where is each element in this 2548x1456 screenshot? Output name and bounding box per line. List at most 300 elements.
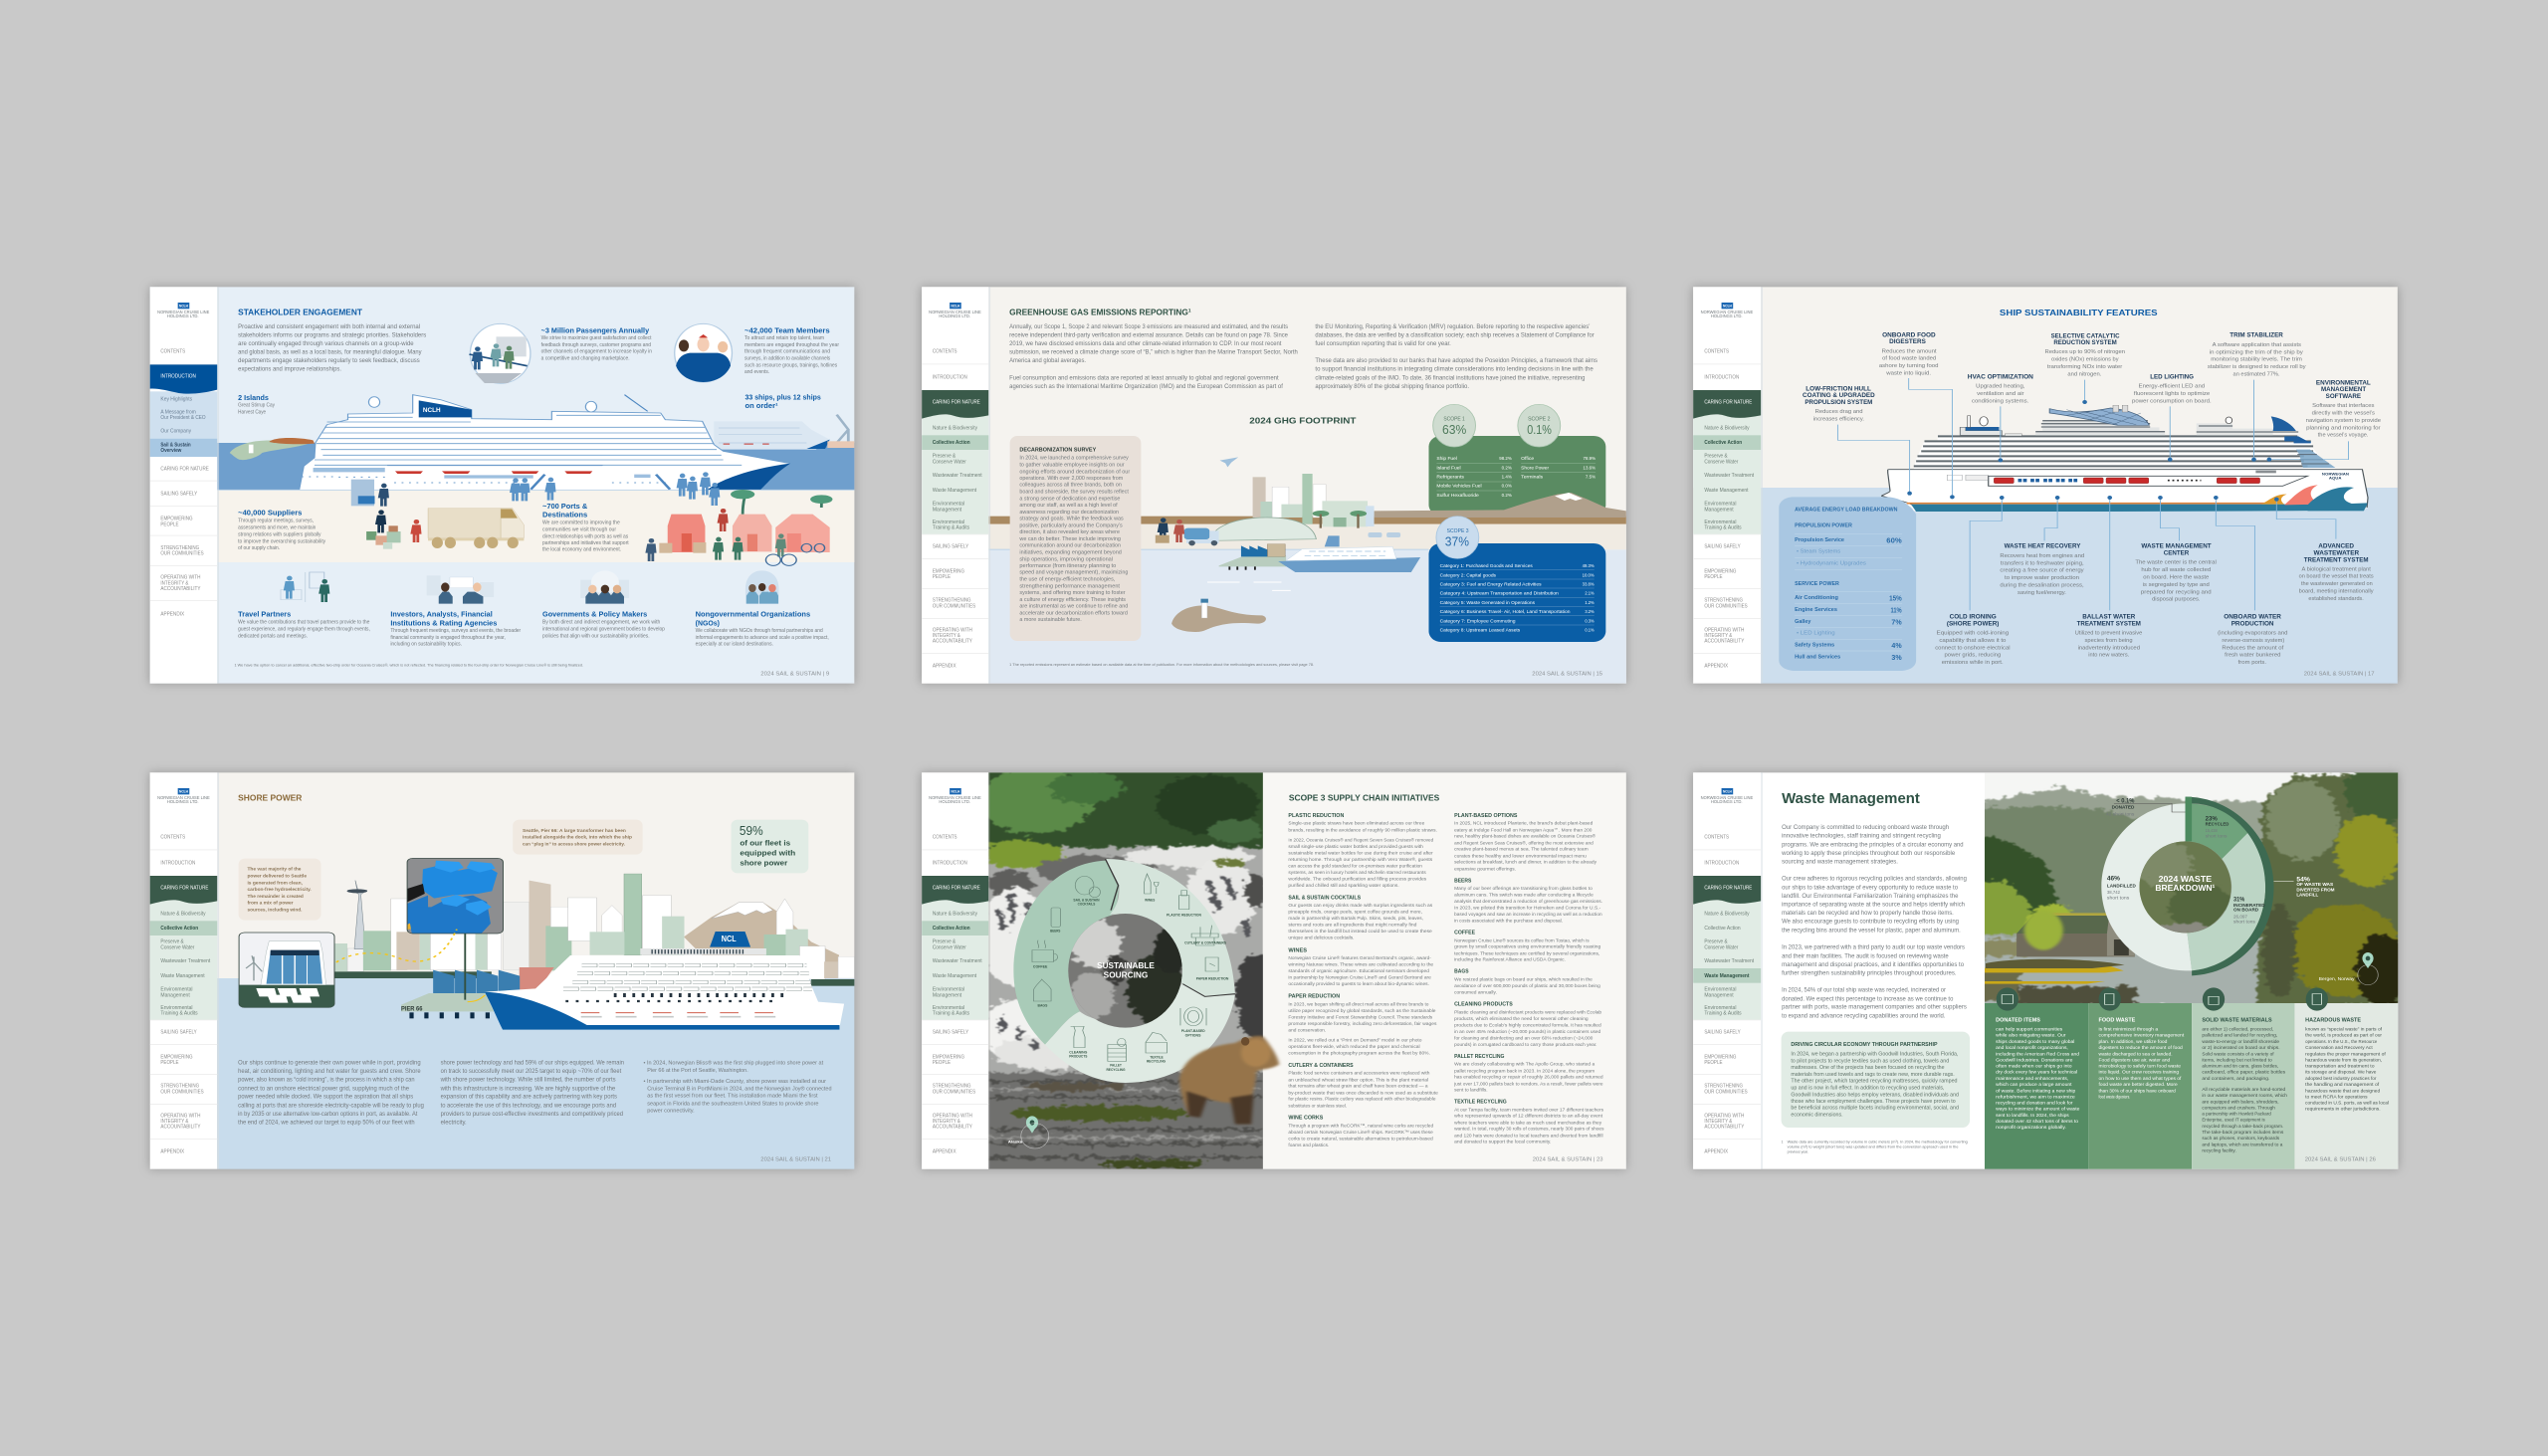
callout: onboard water production: PRODUCTION: [2231, 620, 2274, 627]
initiatives column 1: SAIL & SUSTAIN COCKTAILS: [1288, 896, 1361, 901]
power connection cable: [336, 930, 485, 1002]
initiatives column 2: selections at breakfast, lunch and dinner, in addition to the already: [1454, 860, 1596, 865]
donut center label: 2024 WASTE: [2159, 875, 2212, 884]
scope 1 and 2 table: Island Fuel: [1436, 466, 1461, 471]
donut segment labels: SAIL & SUSTAIN: [1073, 898, 1099, 902]
logo: [929, 303, 981, 319]
panel: average energy load breakdown: • Hydrodynamic Upgrades: [1797, 561, 1866, 566]
sidebar navigation: Training & Audits: [1704, 525, 1742, 530]
initiatives column 1: [1288, 814, 1438, 1148]
initiatives column 2: CLEANING PRODUCTS: [1454, 1002, 1513, 1007]
map pin: Alaska: [1008, 1116, 1049, 1148]
sidebar navigation: OUR COMMUNITIES: [1704, 604, 1748, 609]
initiatives column 1: for plastic resins. Plastic cutlery was replaced with other biodegradable: [1288, 1097, 1435, 1102]
body text: and their main facilities. The audit is focused on reviewing waste: [1782, 952, 1949, 959]
initiatives column 1: in partnership by Norwegian Cruise Line® and Gerard Bertrand are: [1288, 975, 1431, 980]
sidebar navigation: Wastewater Treatment: [933, 474, 982, 479]
sidebar navigation: STRENGTHENING: [160, 1084, 199, 1089]
callout: cold ironing: [1935, 613, 2011, 666]
donut labels: short tons: [2107, 896, 2129, 901]
sidebar navigation: Training & Audits: [933, 525, 969, 530]
logo: HOLDINGS LTD.: [1711, 314, 1743, 319]
block: investors: [390, 610, 521, 647]
intro text column 1: [1009, 322, 1298, 390]
callout: cold ironing: emissions while in port.: [1942, 661, 2004, 666]
callout: hydroelectricity: The remainder is created: [247, 895, 304, 900]
initiatives column 2: pallet recycling program back in 2023. In 2024 alone, the program: [1454, 1069, 1594, 1074]
donut labels: 54%: [2296, 876, 2310, 883]
block: team members: To attract and retain top talent, team: [744, 336, 824, 341]
pier illustration: [401, 967, 554, 1018]
logo: [1701, 303, 1753, 319]
column: food waste: is first minimized through a: [2099, 1027, 2159, 1032]
callout: trim stabilizer: [2208, 331, 2307, 377]
body text column 1: power, also known as “cold ironing”, is the process in which a ship can: [238, 1076, 415, 1083]
callout: onboard food digesters: ashore by turning food: [1879, 364, 1938, 369]
column: solid waste materials: compactors and crushers. Through: [2202, 1106, 2275, 1111]
block: ports: communities we visit through our: [542, 527, 616, 532]
column: donated items: maintenance and enhancements,: [1996, 1077, 2069, 1082]
panel: average energy load breakdown: PROPULSION POWER: [1795, 523, 1852, 528]
bear: [1179, 1036, 1279, 1125]
callout: onboard water production: ONBOARD WATER: [2224, 613, 2282, 620]
initiatives column 1: WINE CORKS: [1288, 1116, 1323, 1121]
callout: LED lighting: [2132, 373, 2212, 404]
block: ports: the local economy and environment.: [542, 547, 621, 552]
scope 3 table: Category 7: Employee Commuting: [1440, 619, 1516, 624]
scope 1 and 2 table: 98.2%: [1499, 457, 1512, 462]
initiatives column 2: Many of our beer offerings are transitioning from glass bottles to: [1454, 887, 1592, 892]
column: hazardous waste: [2305, 1018, 2389, 1112]
body text: [1781, 823, 1967, 1019]
donut labels: short tons: [2206, 834, 2228, 839]
sidebar navigation: Nature & Biodiversity: [933, 912, 978, 917]
body text column 1: connect to an onshore electrical power grid, supplying much of the: [238, 1085, 409, 1092]
sidebar navigation: OPERATING WITH: [1704, 628, 1744, 633]
intro text: and global basis, as well as a local basis, for meaningful dialogue. Many: [238, 348, 422, 355]
initiatives column 1: that remains after wheat grain and chaff have been extracted — a: [1288, 1084, 1428, 1089]
village houses and cyclist illustration: [645, 490, 832, 565]
callout: waste heat recovery: creating a free source of energy: [2000, 568, 2085, 573]
sidebar navigation: Preserve &: [933, 454, 956, 459]
column: hazardous waste: transportation and treatment to: [2305, 1064, 2375, 1069]
donut labels: OF WASTE WAS: [2296, 883, 2333, 888]
map pin: Bergen: Bergen, Norway: [2319, 977, 2355, 982]
donut labels: 23%: [2206, 815, 2218, 822]
block: passengers: We strive to maximize guest satisfaction and collect: [541, 336, 652, 341]
panel: decarbonization survey: colleagues across all three brands, both on: [1019, 483, 1122, 488]
callout: selective catalytic reduction: [2045, 332, 2125, 377]
sidebar navigation: Training & Audits: [933, 1011, 969, 1016]
scope 2 bubble: SCOPE 2: [1528, 417, 1551, 422]
sidebar navigation: ACCOUNTABILITY: [160, 587, 200, 592]
initiatives column 2: just over 17,000 pallets back to vendors. As a result, fewer pallets were: [1453, 1082, 1603, 1087]
initiatives column 2: creative plant-based menus at sea. The talented culinary team: [1454, 847, 1589, 852]
initiatives column 1: by-product waste that was once discarded is now used as a substitute: [1288, 1091, 1438, 1096]
intro text: [238, 322, 426, 372]
callout: trim stabilizer: monitoring stability levels. The trim: [2211, 357, 2302, 362]
island with lighthouse: [230, 438, 315, 460]
panel: greenhouse gas emissions page: [922, 287, 1626, 684]
photo: Norwegian fjord and cabin: [1985, 772, 2399, 1003]
sidebar navigation: APPENDIX: [1704, 664, 1728, 669]
callout: Seattle Pier 66: can “plug in” to access shore power electricity.: [523, 842, 625, 847]
body text: landfill. Our Environmental Familiarization Training emphasizes the: [1782, 892, 1958, 900]
column: donated items: ways to minimize the amount of waste: [1995, 1107, 2079, 1112]
panel: driving circular economy: DRIVING CIRCULAR ECONOMY THROUGH PARTNERSHIP: [1791, 1043, 1938, 1048]
block: travel partners: guest experience, and regularly engage them through events,: [238, 627, 370, 632]
block: governments: [542, 610, 665, 639]
panel: decarbonization survey: among our staff, as well as a high level of: [1019, 504, 1118, 509]
column: donated items: Goodwill Industries. Donations are: [1996, 1058, 2072, 1063]
callout: ballast water treatment: species from being: [2085, 639, 2133, 644]
block: travel partners: We value the contributions that travel partners provide to the: [238, 620, 370, 625]
panel: decarbonization survey: communication around our decarbonization: [1019, 543, 1121, 548]
panel: driving circular economy: [1782, 1032, 1970, 1128]
initiatives column 1: substitutes or stainless steel.: [1288, 1104, 1347, 1109]
sidebar navigation: Environmental: [1704, 502, 1736, 507]
column: donated items: can help support communities: [1996, 1027, 2062, 1032]
page footer: 2024 SAIL & SUSTAIN | 21: [760, 1157, 832, 1162]
block: team members: through frequent communications and: [744, 349, 830, 354]
logo: NORWEGIAN CRUISE LINE: [1701, 311, 1753, 315]
body text column 2: expansion of this capability and are actively partnering with key ports: [441, 1093, 617, 1100]
donut center image: [1068, 914, 1182, 1028]
scope 1 and 2 table: Office: [1521, 457, 1534, 462]
panel: decarbonization survey: ship operations, improving operational: [1019, 557, 1113, 562]
column: solid waste materials: recycled through a take-back program.: [2202, 1125, 2284, 1130]
sidebar navigation: APPENDIX: [933, 1149, 956, 1154]
icon: passengers circle: [469, 323, 531, 383]
donut segment labels: TEXTILE: [1150, 1055, 1164, 1059]
callout: onboard water production: reverse-osmosis system): [2222, 639, 2284, 644]
sidebar navigation: SAILING SAFELY: [933, 1030, 968, 1035]
scope 3 table: Category 4: Upstream Transportation and Distribution: [1440, 591, 1559, 596]
donut labels: RECYCLED: [2206, 822, 2229, 827]
body text: innovative technologies, staff training and stringent recycling: [1782, 832, 1941, 839]
sidebar navigation: A Message from: [160, 410, 196, 415]
sidebar navigation: CONTENTS: [160, 349, 185, 354]
sidebar navigation: APPENDIX: [1704, 1149, 1728, 1154]
panel: driving circular economy: Goodwill Industries also helps employ veterans, disabled individuals and: [1791, 1093, 1959, 1098]
column: hazardous waste: the world, is produced as part of our: [2305, 1033, 2382, 1038]
callout: waste management center: disposal purposes.: [2152, 597, 2201, 602]
scope 3 bubble: SCOPE 3: [1447, 529, 1469, 534]
panel: driving circular economy: those who face employment challenges. These projects have proven to: [1791, 1100, 1956, 1105]
column: donated items: [1995, 1018, 2079, 1131]
intro text: departments engage stakeholders regularly to seek feedback, discuss: [238, 356, 420, 364]
initiatives column 2: in costs associated with the purchase and disposal.: [1454, 919, 1563, 924]
scope 2 bubble: [1518, 404, 1561, 447]
body text: working to apply these principles throughout both our responsible: [1781, 849, 1955, 857]
logo: HOLDINGS LTD.: [167, 800, 199, 805]
callout: environmental management software: Software that interfaces: [2312, 404, 2375, 409]
column: donated items: refurbishment, we aim to maximize: [1996, 1095, 2075, 1100]
panel: decarbonization survey: DECARBONIZATION SURVEY: [1019, 448, 1096, 453]
sidebar navigation: Environmental: [933, 502, 964, 507]
callout: HVAC optimization: HVAC OPTIMIZATION: [1968, 373, 2033, 380]
block: ships: [744, 393, 821, 410]
callout: advanced wastewater treatment: [2299, 542, 2375, 602]
column: food waste: microbiology to safely turn food waste: [2099, 1064, 2181, 1069]
sidebar navigation: CONTENTS: [160, 835, 185, 840]
intro text column 2: the EU Monitoring, Reporting & Verification (MRV) regulation. Before reporting to the respective agencies’: [1315, 322, 1591, 330]
heading: Waste Management: [1782, 790, 1920, 806]
logo: HOLDINGS LTD.: [939, 314, 970, 319]
callout: waste management center: CENTER: [2164, 549, 2190, 556]
callout: selective catalytic reduction: oxides (NOx) emissions by: [2051, 357, 2119, 362]
initiatives column 1: Norwegian Cruise Line® features Gerard Bertrand’s organic, award-: [1288, 955, 1431, 961]
initiatives column 2: techniques. These techniques are certified by several organizations,: [1454, 951, 1600, 956]
sidebar navigation: Our Company: [160, 429, 192, 434]
block: governments: Governments & Policy Makers: [542, 610, 647, 618]
panel: decarbonization survey: direction, it also revealed key areas where: [1019, 530, 1121, 535]
block: passengers: a competitive and changing marketplace.: [541, 356, 630, 361]
stat callout: 59 percent: [732, 820, 808, 873]
sidebar navigation: Wastewater Treatment: [933, 959, 982, 964]
panel: decarbonization survey: a culture of energy efficiency. These insights: [1019, 598, 1126, 603]
scope 1 and 2 table: 13.6%: [1584, 466, 1595, 471]
block: islands: Harvest Caye: [238, 410, 267, 415]
body text column 2: [440, 1059, 624, 1126]
initiatives column 1: aboard certain Norwegian Cruise Line® ships. ReCORK™ uses these: [1288, 1130, 1433, 1136]
sidebar navigation: Collective Action: [933, 927, 970, 932]
sidebar navigation: OUR COMMUNITIES: [933, 1090, 975, 1095]
column: solid waste materials: and containers, and packaging.: [2202, 1077, 2270, 1082]
sidebar navigation: PEOPLE: [933, 575, 951, 580]
intro text column 2: These data are also provided to our banks that have adopted the Poseidon Principles, a framework that aims: [1315, 356, 1597, 364]
callout: waste management center: hub for all waste collected: [2141, 568, 2211, 573]
column: donated items: which can produce a large amount: [1995, 1083, 2072, 1088]
sidebar navigation: CARING FOR NATURE: [933, 886, 980, 891]
panel: decarbonization survey: awareness regarding our decarbonization: [1019, 511, 1119, 516]
column: solid waste materials: are equipped with balers, shredders,: [2202, 1100, 2279, 1105]
callout: environmental management software: navigation system to provide: [2306, 419, 2382, 424]
callout: advanced wastewater treatment: A biological treatment plant: [2301, 567, 2371, 572]
body text column 1: power needed while docked. We support the aspiration that all ships: [238, 1093, 413, 1100]
donut labels: LANDFILL: [2296, 893, 2319, 898]
sidebar navigation: Conserve Water: [1704, 945, 1738, 950]
column: food waste: [2098, 1018, 2185, 1100]
block: ports: [542, 502, 629, 552]
initiatives column 1: consumption in the photography program across the fleet by 80%.: [1288, 1051, 1430, 1056]
beach band: [217, 490, 854, 562]
intro text: are continually engaged through various channels on a group-wide: [238, 339, 414, 347]
initiatives column 2: for cleaning and disinfecting and an over 60% reduction (~24,000: [1454, 1036, 1592, 1041]
block: governments: policies that align with our sustainability priorities.: [542, 634, 650, 639]
callout: waste management center: The waste center is the central: [2135, 560, 2217, 565]
initiatives column 2: including the Rainforest Alliance and USDA Organic.: [1454, 957, 1566, 962]
body text column 2: with this infrastructure is increasing. We are highly supportive of the: [440, 1085, 615, 1092]
background ship and crane: [714, 415, 854, 450]
callout: HVAC optimization: conditioning systems.: [1972, 399, 2029, 404]
column: donated items: ships donated goods to many global: [1996, 1040, 2074, 1045]
panel: average energy load breakdown: Air Conditioning: [1795, 596, 1838, 601]
callout: hydroelectricity: [239, 859, 320, 921]
initiatives column 1: systems, as seen in luxury hotels and Michelin starred restaurants: [1288, 871, 1426, 876]
scope 3 table: 1.2%: [1585, 601, 1594, 606]
scope 3 bubble: 37%: [1445, 535, 1469, 549]
callout: selective catalytic reduction: Reduces up to 90% of nitrogen: [2045, 350, 2125, 355]
callout: low-friction hull coating: PROPULSION SYSTEM: [1805, 398, 1872, 406]
panel: average energy load breakdown: SERVICE POWER: [1795, 582, 1839, 587]
sidebar navigation: STRENGTHENING: [933, 598, 971, 603]
body text column 3 bullets: [644, 1061, 832, 1114]
callout: selective catalytic reduction: SELECTIVE CATALYTIC: [2051, 332, 2120, 339]
sidebar navigation: EMPOWERING: [933, 1055, 964, 1060]
initiatives column 2: new, healthy plant-based dishes are available on Oceania Cruises®: [1454, 834, 1596, 839]
callout: hydroelectricity: sources, including wind.: [247, 908, 303, 913]
page footer: 2024 SAIL & SUSTAIN | 17: [2304, 672, 2375, 677]
panel: average energy load breakdown: 3%: [1891, 653, 1902, 662]
initiatives column 2: BAGS: [1454, 969, 1469, 974]
panel: driving circular economy: In 2024, we began a partnership with Goodwill Industries, South Florida,: [1791, 1052, 1959, 1057]
footnote: [1782, 1140, 1968, 1153]
scope 1 and 2 table: Ship Fuel: [1436, 457, 1457, 462]
heading: SHIP SUSTAINABILITY FEATURES: [2000, 309, 2158, 317]
callout: onboard water production: (including evaporators and: [2218, 631, 2287, 636]
sidebar navigation: Management: [1704, 993, 1734, 998]
callout: advanced wastewater treatment: on board the vessel that treats: [2299, 574, 2374, 579]
sidebar navigation: CARING FOR NATURE: [160, 467, 209, 472]
panel: decarbonization survey: are instrumental as we continue to refine and: [1019, 604, 1128, 609]
column: donated items: dry dock every few years for technical: [1996, 1070, 2077, 1075]
column: solid waste materials: or 2) incinerated on board our ships.: [2202, 1046, 2280, 1051]
sidebar navigation: Environmental: [1704, 520, 1736, 525]
callout: environmental management software: ENVIRONMENTAL: [2316, 379, 2371, 386]
donut segment labels: PALLET: [1110, 1063, 1122, 1067]
column: solid waste materials: Enterprise, used IT equipment is: [2202, 1118, 2265, 1123]
initiatives column 2: analysis that demonstrated a reduction of greenhouse gas emissions.: [1454, 900, 1602, 905]
block: investors: Investors, Analysts, Financial: [390, 610, 493, 618]
sidebar navigation: Preserve &: [1704, 454, 1728, 459]
block: islands: [238, 393, 276, 415]
sidebar navigation: Key Highlights: [160, 397, 192, 402]
callout: cold ironing: connect to onshore electrical: [1935, 646, 2011, 651]
sidebar navigation: Wastewater Treatment: [160, 959, 210, 964]
panel: average energy load breakdown: Safety Systems: [1795, 643, 1835, 648]
sidebar navigation: APPENDIX: [933, 664, 956, 669]
logo: NCLH: [952, 789, 959, 793]
sidebar navigation: Environmental: [933, 987, 964, 992]
block: investors: including on sustainability topics.: [390, 642, 462, 647]
callout: ballast water treatment: inadvertently introduced: [2078, 646, 2140, 651]
callout: Seattle Pier 66: installed alongside the dock, into which the ship: [523, 835, 632, 840]
donut segment labels: RECYCLING: [1147, 1059, 1166, 1063]
initiatives column 1: Single-use plastic straws have been eliminated across our three: [1288, 821, 1424, 826]
scope 1 and 2 table: 78.9%: [1584, 457, 1595, 462]
block: team members: members are engaged throughout the year: [744, 343, 839, 348]
sidebar navigation: SAILING SAFELY: [933, 544, 968, 549]
intro text column 2: fuel consumption reporting that is valid for one year.: [1315, 339, 1451, 347]
sidebar navigation: Collective Action: [160, 927, 198, 932]
block: suppliers: ~40,000 Suppliers: [238, 509, 302, 517]
donut labels: INCINERATED: [2233, 904, 2265, 909]
callout: environmental management software: [2306, 379, 2382, 438]
sidebar navigation: ACCOUNTABILITY: [160, 1125, 200, 1130]
scope 3 table: 33.8%: [1583, 582, 1594, 587]
block: team members: surveys, in addition to available channels: [744, 356, 830, 361]
donut segment labels: OPTIONS: [1185, 1033, 1200, 1037]
column: hazardous waste: the handling and management of: [2305, 1083, 2380, 1088]
sidebar navigation: Collective Action: [1704, 441, 1742, 446]
column: solid waste materials: such as phones, monitors, keyboards: [2202, 1137, 2279, 1142]
sidebar navigation: Conserve Water: [933, 945, 966, 950]
intro text column 2: to support financial institutions in integrating climate considerations into lending decisions in line with the: [1315, 365, 1593, 372]
logo: NORWEGIAN CRUISE LINE: [1701, 796, 1753, 801]
callout: onboard water production: fresh water bunkered: [2225, 653, 2281, 658]
donut segment labels: RECYCLING: [1106, 1068, 1126, 1072]
block: passengers: other channels of engagement to increase loyalty in: [541, 349, 652, 354]
stat callout: 59 percent: equipped with: [740, 849, 795, 857]
block: NGOs: We collaborate with NGOs through formal partnerships and: [696, 629, 823, 634]
callout connector lines: [1837, 378, 2348, 610]
column: food waste: food waste are better digested. More: [2099, 1083, 2178, 1088]
initiatives column 1: PLASTIC REDUCTION: [1288, 814, 1344, 819]
column: food waste: FOOD WASTE: [2099, 1018, 2135, 1023]
block: suppliers: to improve the overarching sustainability: [238, 539, 326, 544]
cruise ship illustration: [217, 395, 854, 490]
donut center label: BREAKDOWN¹: [2155, 884, 2216, 893]
block: islands: Great Stirrup Cay: [238, 403, 276, 408]
sidebar navigation: Nature & Biodiversity: [160, 912, 206, 917]
page footer: 2024 SAIL & SUSTAIN | 9: [760, 672, 830, 677]
sourcing donut diagram: [1013, 859, 1235, 1083]
panel: average energy load breakdown: • Steam Systems: [1797, 549, 1840, 554]
column: food waste: digesters to reduce the amount of food: [2099, 1046, 2183, 1051]
sidebar navigation: Nature & Biodiversity: [1704, 912, 1750, 917]
initiatives column 2: PLANT-BASED OPTIONS: [1454, 814, 1517, 819]
initiatives column 1: corks to create natural, sustainable alternatives to petroleum-based: [1288, 1137, 1433, 1142]
column: hazardous waste: conducted in U.S. ports, as well as local: [2305, 1101, 2389, 1106]
sidebar navigation: EMPOWERING: [160, 517, 193, 521]
footnote: previous year.: [1788, 1149, 1808, 1153]
sidebar navigation: CONTENTS: [933, 349, 957, 354]
panel: decarbonization survey: In 2024, we launched a comprehensive survey: [1019, 456, 1130, 461]
initiatives column 2: and Regent Seven Seas Cruises®, offering the most extensive and: [1454, 840, 1593, 846]
body text: to expand and advance recycling capabilities around the world.: [1782, 1012, 1945, 1019]
donut segment labels: PLANT-BASED: [1181, 1029, 1205, 1033]
column: hazardous waste: regulates the proper management of: [2305, 1052, 2386, 1057]
waste column backgrounds: [1985, 1003, 2398, 1169]
callout: ballast water treatment: into new waters.: [2088, 653, 2130, 658]
intro text: Proactive and consistent engagement with both internal and external: [238, 322, 420, 330]
initiatives column 2: based voyages and saw an increase in recycling as well as a reduction: [1454, 913, 1602, 918]
initiatives column 2: eatery at Indulge Food Hall on Norwegian Aqua℠. More than 200: [1454, 827, 1592, 833]
column: food waste: into liquid. Our crew receives training: [2099, 1070, 2179, 1075]
sidebar navigation: [150, 772, 219, 1169]
initiatives column 1: occasionally provided to guests to learn about bio-dynamic wines.: [1288, 982, 1429, 987]
panel: driving circular economy: The other project, which targeted recycling mattresses, quickly ramped: [1791, 1079, 1958, 1084]
column: food waste: on how to use them and what types of: [2099, 1077, 2182, 1082]
land and water bands: [988, 517, 1626, 684]
intro text column 1: Fuel consumption and emissions data are reported at least annually to global and regional government: [1009, 374, 1279, 381]
column: solid waste materials: SOLID WASTE MATERIALS: [2202, 1018, 2272, 1023]
body text: Our Company is committed to reducing onboard waste through: [1782, 823, 1949, 831]
block: NGOs: [696, 610, 829, 647]
sidebar navigation: INTEGRITY &: [1704, 634, 1732, 639]
sidebar navigation: CARING FOR NATURE: [160, 886, 208, 891]
footnote: volume (m³) to weight (short tons) was updated and differs from the conversion approach used in the: [1788, 1144, 1959, 1148]
callout: low-friction hull coating: increases efficiency.: [1813, 417, 1864, 422]
panel: driving circular economy: mattresses. One of the projects has been focused on recycling the: [1791, 1066, 1945, 1071]
body text: In 2024, 54% of our total ship waste was recycled, incinerated or: [1782, 986, 1946, 993]
icons: stakeholder groups: [281, 570, 778, 604]
column: donated items: while also mitigating waste. Our: [1995, 1033, 2066, 1038]
body text column 2: on track to successfully meet our 2025 target to equip ~70% of our fleet: [441, 1067, 621, 1075]
donut labels: short tons: [2233, 920, 2255, 925]
logo: [929, 788, 981, 805]
